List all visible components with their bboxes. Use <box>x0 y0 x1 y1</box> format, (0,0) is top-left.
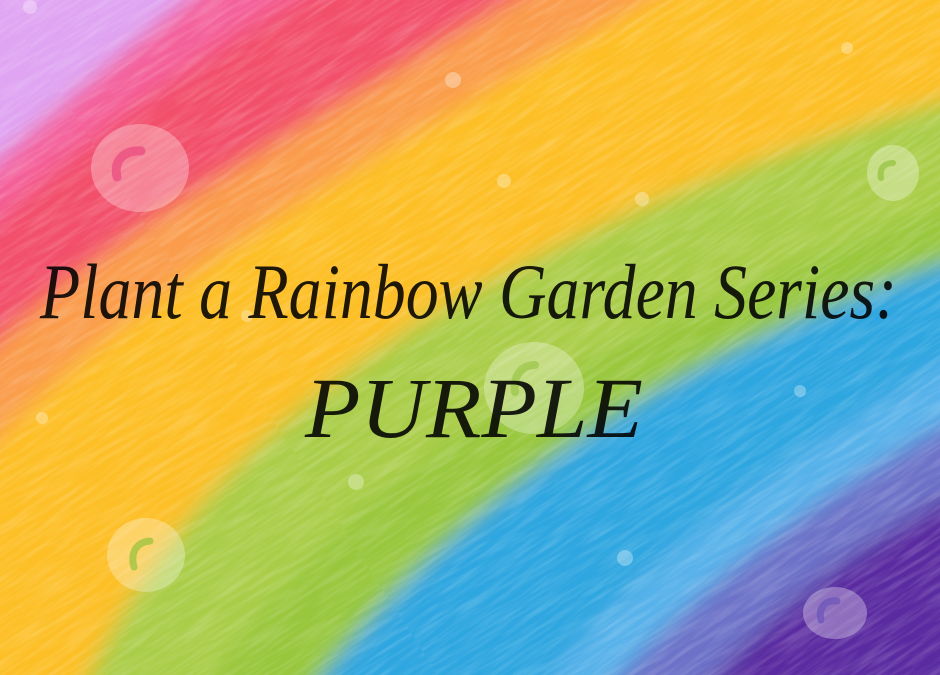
title line 2: PURPLE <box>304 361 643 456</box>
title <box>39 250 897 456</box>
bubble: centre <box>484 342 584 434</box>
bubble: top left <box>91 124 189 212</box>
large bubbles <box>91 124 919 639</box>
small dots <box>23 0 853 566</box>
bubble: bottom right <box>803 587 867 639</box>
bubble: top right <box>867 145 919 201</box>
title line 1: Plant a Rainbow Garden Series: <box>39 250 897 336</box>
bubble: bottom left <box>107 518 185 592</box>
